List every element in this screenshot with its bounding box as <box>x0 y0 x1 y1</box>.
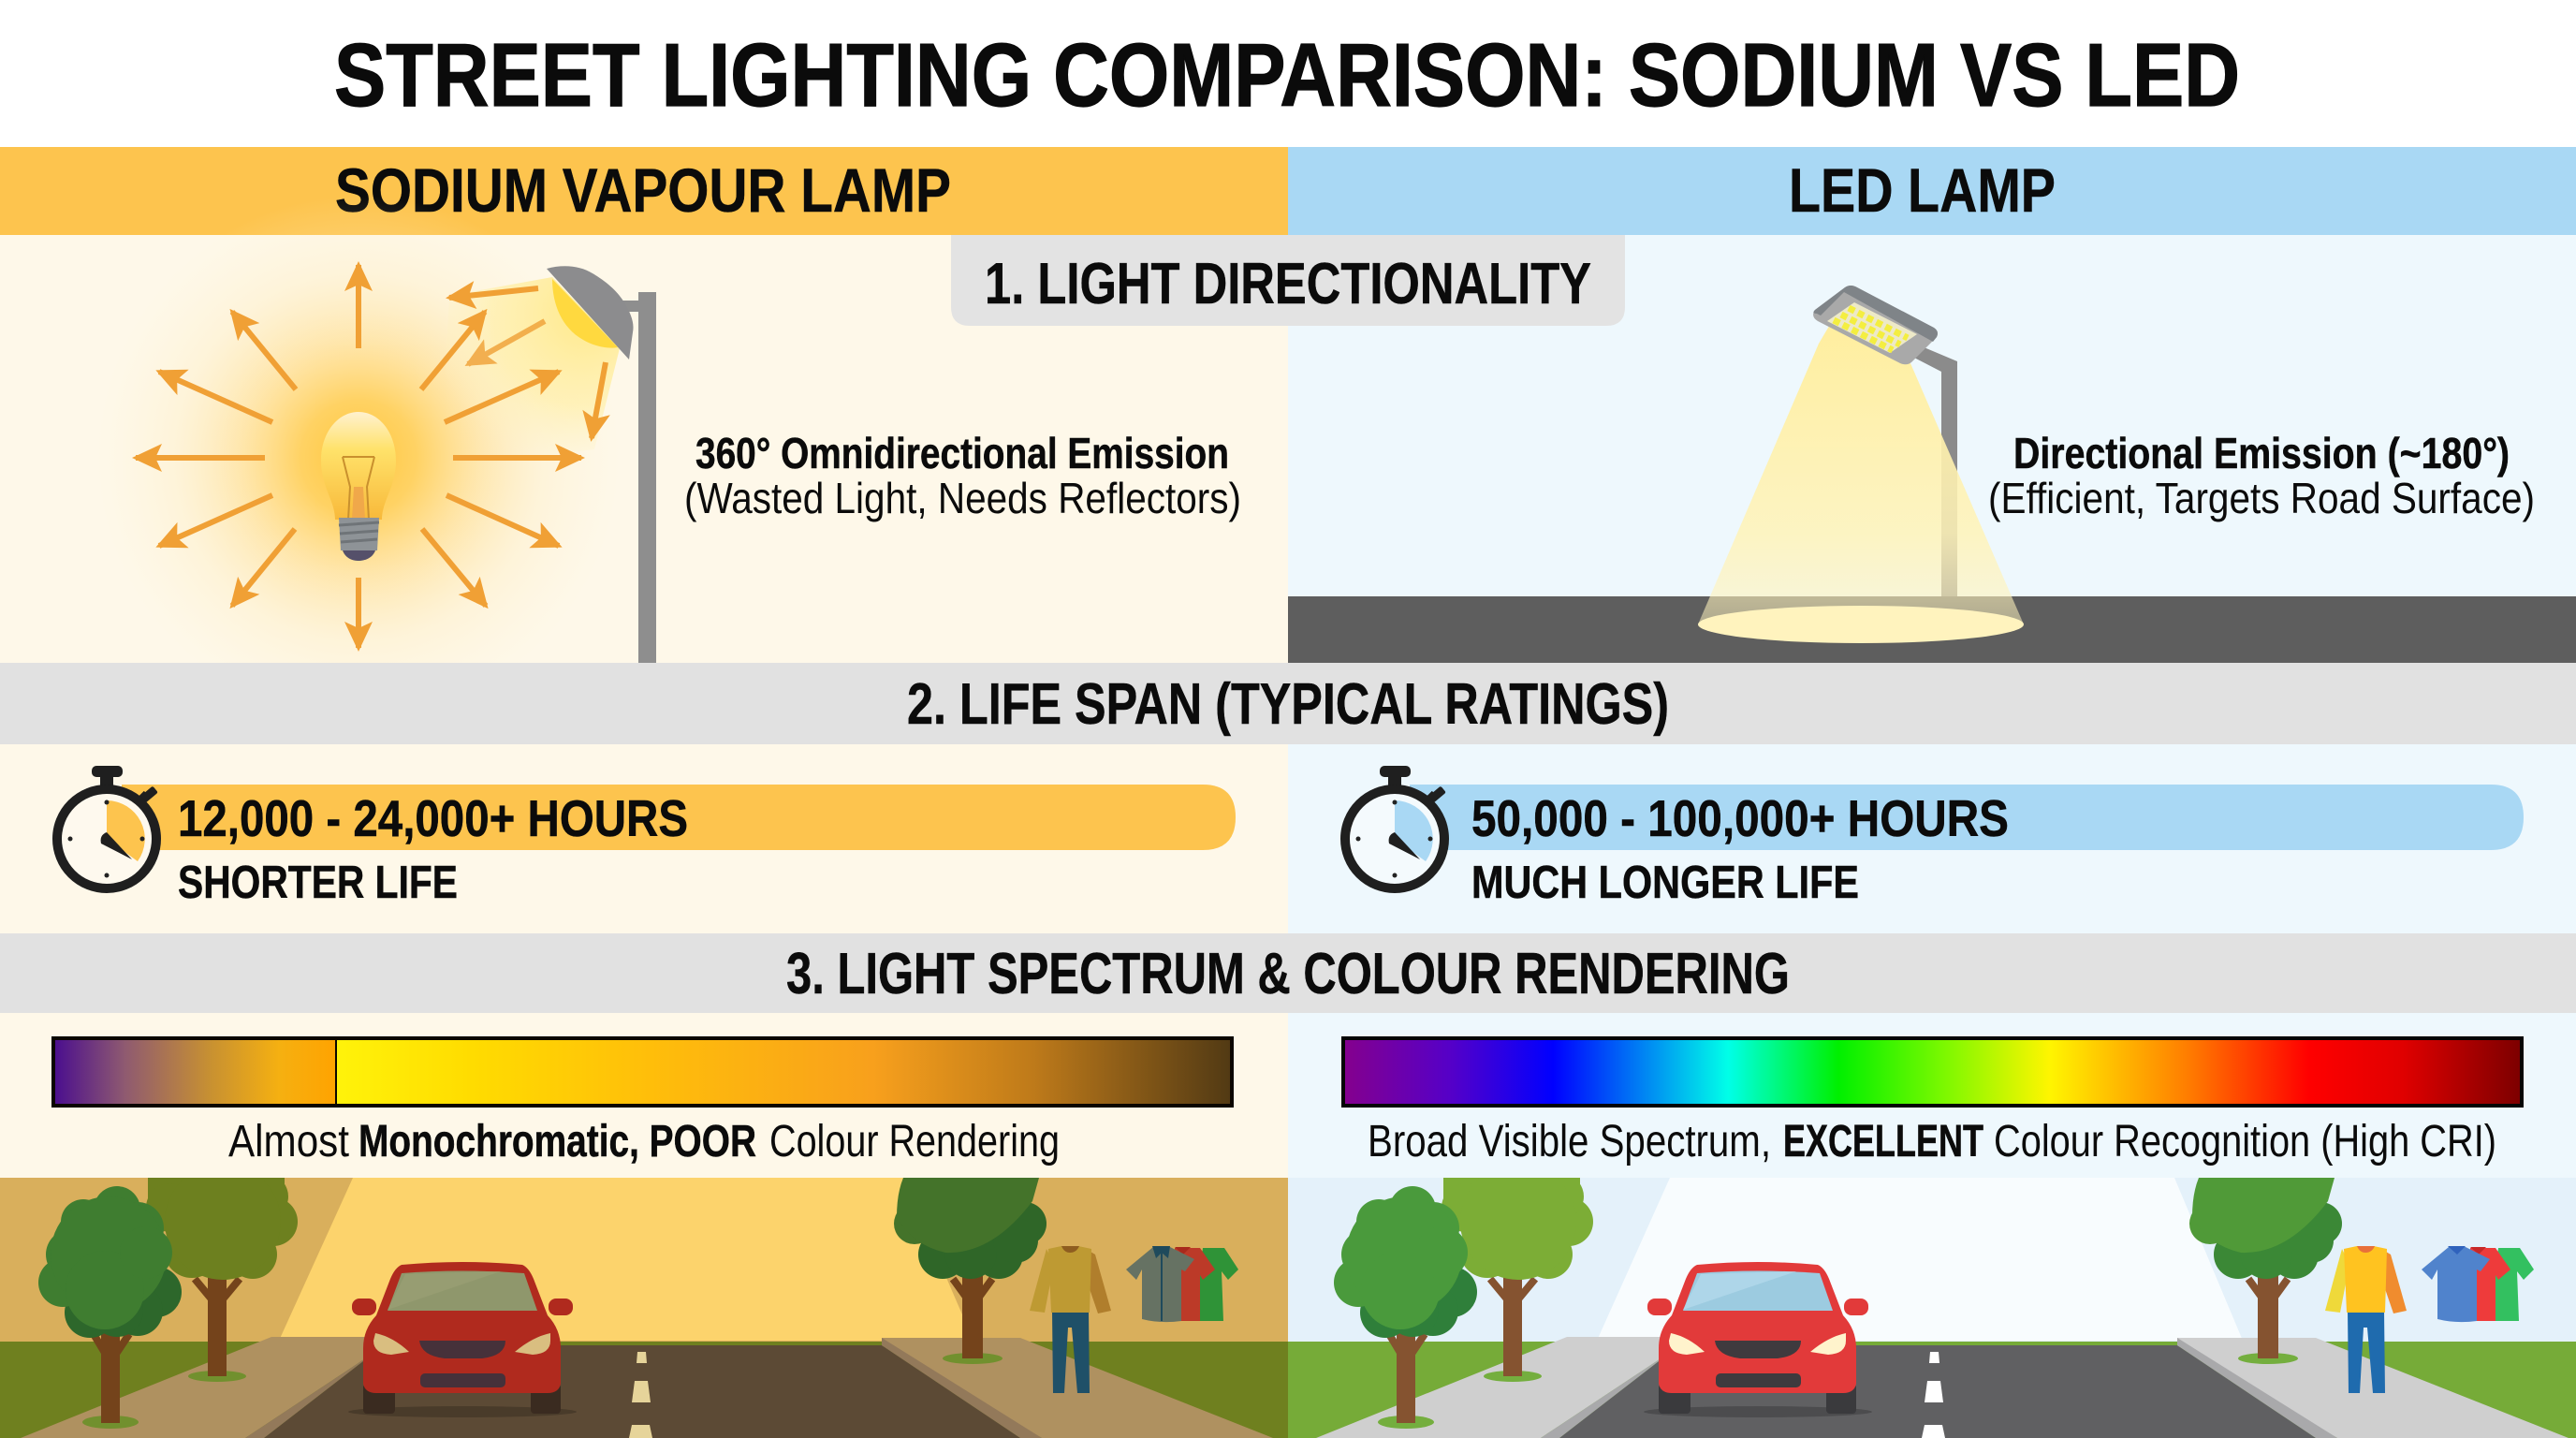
lamp beam <box>1698 323 2024 624</box>
pool of light <box>1698 606 2024 643</box>
illustration: LED street lamp <box>1698 286 2024 643</box>
life span bar <box>122 785 1236 850</box>
lamp reflector head <box>547 266 634 360</box>
spectrum caption: EXCELLENT <box>1783 1117 1983 1167</box>
arm <box>618 301 640 312</box>
back-left tree <box>1442 1164 1593 1382</box>
road <box>264 1345 1020 1438</box>
spectrum caption: Monochromatic, POOR <box>359 1117 756 1167</box>
text: sodium directionality description: (Wasted Light, Needs Reflectors) <box>684 474 1241 522</box>
column header: sodium vapour lamp <box>0 147 1288 235</box>
light beam <box>279 1178 973 1341</box>
pole <box>638 292 656 663</box>
wasted light arrows <box>449 288 606 438</box>
panel: sodium life span <box>0 744 1288 933</box>
back-left tree <box>146 1164 298 1382</box>
panel: sodium directionality background <box>0 235 1288 663</box>
spectrum caption: Colour Rendering <box>769 1117 1060 1167</box>
column header: LED lamp: LED LAMP <box>1789 155 2056 225</box>
light bulb <box>321 412 396 561</box>
column header: LED lamp <box>1288 147 2576 235</box>
sky <box>1286 1178 2576 1343</box>
person clothing <box>1030 1246 1111 1393</box>
heading tab: 1. light directionality <box>951 235 1625 326</box>
life span hours: 50,000 - 100,000+ HOURS <box>1471 789 2009 847</box>
road <box>1559 1345 2316 1438</box>
lane dashes <box>629 1352 652 1438</box>
hanging shirts <box>1126 1246 1238 1322</box>
illustration: omnidirectional bulb with arrows <box>96 196 621 720</box>
sky <box>0 1178 1301 1343</box>
light beam <box>1597 1178 2243 1341</box>
spectrum caption <box>1368 1117 2496 1167</box>
life span verdict: MUCH LONGER LIFE <box>1471 858 1859 908</box>
pole and arm <box>1914 346 1957 596</box>
spectrum caption <box>228 1117 1060 1167</box>
panel: sodium spectrum <box>0 1013 1288 1178</box>
text: sodium directionality description: 360° Omnidirectional Emission <box>695 429 1229 477</box>
front-left tree <box>1334 1186 1477 1429</box>
heading band: 2. life span: 2. LIFE SPAN (TYPICAL RATINGS) <box>907 672 1669 737</box>
right tree <box>2189 1178 2342 1364</box>
grass <box>1286 1342 2576 1438</box>
car <box>348 1262 577 1417</box>
icon: stopwatch <box>1345 766 1446 888</box>
scene: LED-lit street <box>1286 1164 2576 1438</box>
column header: sodium vapour lamp: SODIUM VAPOUR LAMP <box>335 155 951 225</box>
sidewalks <box>1316 1337 2569 1438</box>
heading tab: 1. light directionality: 1. LIGHT DIRECTIONALITY <box>985 252 1591 316</box>
life span verdict: SHORTER LIFE <box>178 858 458 908</box>
sidewalks <box>21 1337 1273 1438</box>
text: sodium directionality description <box>684 429 1241 522</box>
bulb glow <box>96 196 621 720</box>
title: STREET LIGHTING COMPARISON: SODIUM VS LED <box>334 25 2240 125</box>
spectrum bar: LED <box>1341 1036 2524 1108</box>
spectrum caption: Almost <box>228 1117 349 1167</box>
heading band: 3. light spectrum <box>0 933 2576 1013</box>
person clothing <box>2325 1246 2407 1393</box>
heading band: 3. light spectrum: 3. LIGHT SPECTRUM & COLOUR RENDERING <box>786 942 1790 1006</box>
grass <box>0 1342 1301 1438</box>
front-left tree <box>38 1186 182 1429</box>
heading band: 2. life span <box>0 663 2576 744</box>
text: LED directionality description <box>1988 429 2535 522</box>
lamp glow <box>552 279 618 348</box>
panel: LED spectrum <box>1288 1013 2576 1178</box>
life span hours: 12,000 - 24,000+ HOURS <box>178 789 688 847</box>
illustration: LED road surface <box>1288 596 2576 663</box>
life span bar <box>1410 785 2524 850</box>
car <box>1644 1262 1872 1417</box>
panel: LED life span <box>1288 744 2576 933</box>
spectrum caption: Broad Visible Spectrum, <box>1368 1117 1771 1167</box>
icon: stopwatch <box>57 766 158 888</box>
lamp light fan <box>440 277 620 468</box>
right tree <box>894 1178 1046 1364</box>
hanging shirts <box>2422 1246 2534 1322</box>
spectrum bar: sodium <box>51 1036 1234 1108</box>
emission arrows <box>136 265 581 648</box>
illustration: sodium street lamp <box>449 266 656 663</box>
panel: LED directionality background <box>1288 235 2576 663</box>
scene: sodium-lit street <box>0 1164 1301 1438</box>
lane dashes <box>1922 1352 1945 1438</box>
LED lamp head <box>1813 286 1938 364</box>
